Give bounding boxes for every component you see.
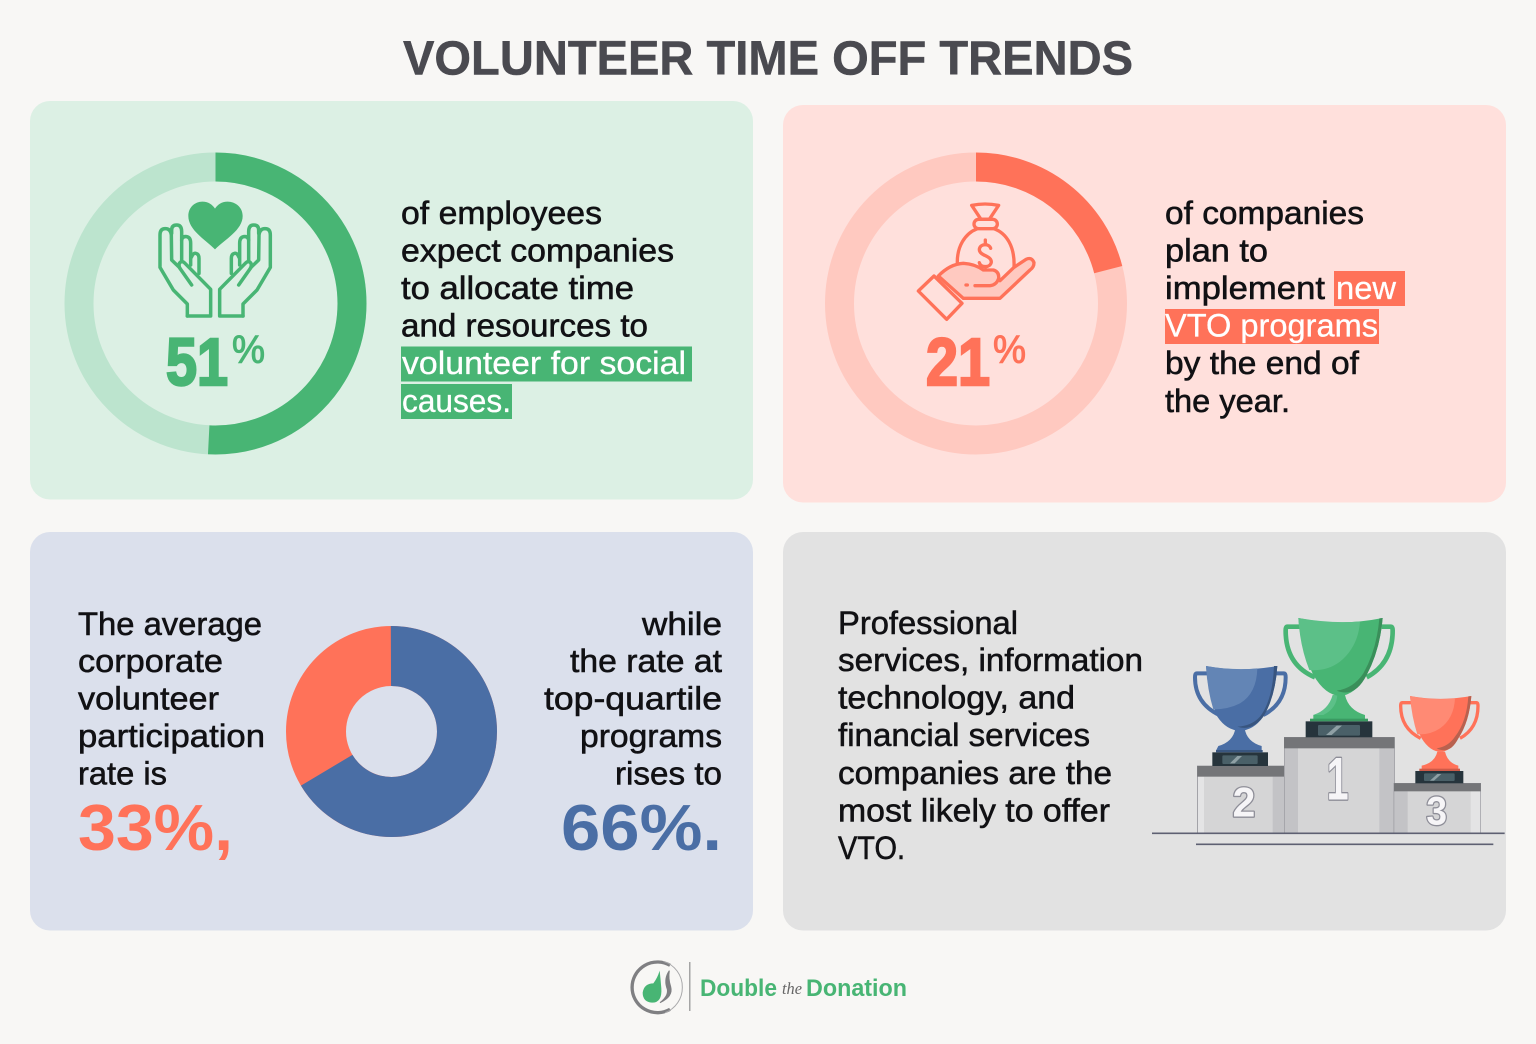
donut chart: 21% [840,167,1112,440]
text block: companies plan: of companies [1165,195,1364,231]
text block: industries: Professional [838,605,1018,641]
text block: industries: services, information [838,642,1143,678]
panel: 51 percent employees [30,101,753,500]
stat: 51%: 51 [166,325,228,400]
panel: participation rate [30,532,753,930]
text block: industries: financial services [838,717,1090,753]
text block: industries: companies are the [838,755,1112,791]
illustration: podium with trophies [1152,618,1505,844]
text block: average rate: participation [78,718,265,754]
icon: hands holding heart [160,202,270,316]
logo wordmark: the [782,979,802,998]
text block: employees expect: to allocate time [401,270,634,306]
logo wordmark: Double [700,975,777,1002]
text block: industries [838,605,1143,866]
logo mark [632,961,682,1013]
text block: employees expect [401,195,692,419]
stat: 66%: 66%. [561,791,722,864]
text block: employees expect: volunteer for social [402,345,686,381]
stat: 51%: % [232,329,265,372]
text block: industries: technology, and [838,680,1075,716]
text block: companies plan [1165,195,1405,419]
text block: companies plan: the year. [1165,383,1290,419]
text block: companies plan: VTO programs [1165,308,1378,344]
trophy: green first place [1286,618,1393,721]
panel: 21 percent companies [783,105,1506,502]
podium [1197,737,1481,833]
podium numbers [1233,745,1447,833]
text block: average rate: rate is [78,756,167,792]
text block: top quartile rate: programs [580,718,722,754]
donut chart: 51% [79,167,352,440]
stat: 33%: 33%, [78,791,233,864]
podium numbers: 3 [1426,789,1447,833]
logo wordmark [700,975,907,1002]
text block: industries: most likely to offer [838,792,1110,828]
text block: employees expect: and resources to [401,308,648,344]
text block: industries: VTO. [838,830,905,866]
text block: average rate [78,606,265,864]
logo wordmark: Donation [806,975,907,1002]
logo divider [689,962,690,1011]
donut chart: 33% vs 66% [316,656,467,807]
text block: average rate: volunteer [78,680,219,716]
panel: industries likely to offer VTO [783,532,1506,930]
text block: companies plan: implement [1165,270,1325,306]
ground lines [1152,833,1505,844]
text block: average rate: The average [78,606,262,642]
trophy: blue second place [1195,666,1286,752]
text block: employees expect: causes. [402,383,511,419]
text block: companies plan: new [1336,270,1397,306]
text block: top quartile rate: rises to [615,756,722,792]
text block: top quartile rate: top-quartile [544,680,722,716]
trophy: orange third place [1401,696,1478,771]
logo: Double the Donation [632,961,907,1013]
text block: companies plan: plan to [1165,232,1268,268]
text block: average rate: corporate [78,643,223,679]
podium numbers: 1 [1327,745,1349,813]
text block: top quartile rate: while [641,606,722,642]
text block: employees expect: expect companies [401,232,674,268]
text block: top quartile rate [544,606,722,864]
trophy bases [1212,721,1463,783]
text block: top quartile rate: the rate at [570,643,722,679]
text block: employees expect: of employees [401,195,602,231]
text block: companies plan: by the end of [1165,345,1359,381]
stat: 21%: % [993,329,1026,372]
title: VOLUNTEER TIME OFF TRENDS [403,32,1133,86]
icon: hand holding money bag [918,204,1034,319]
stat: 21%: 21 [926,325,990,400]
podium numbers: 2 [1233,778,1255,825]
